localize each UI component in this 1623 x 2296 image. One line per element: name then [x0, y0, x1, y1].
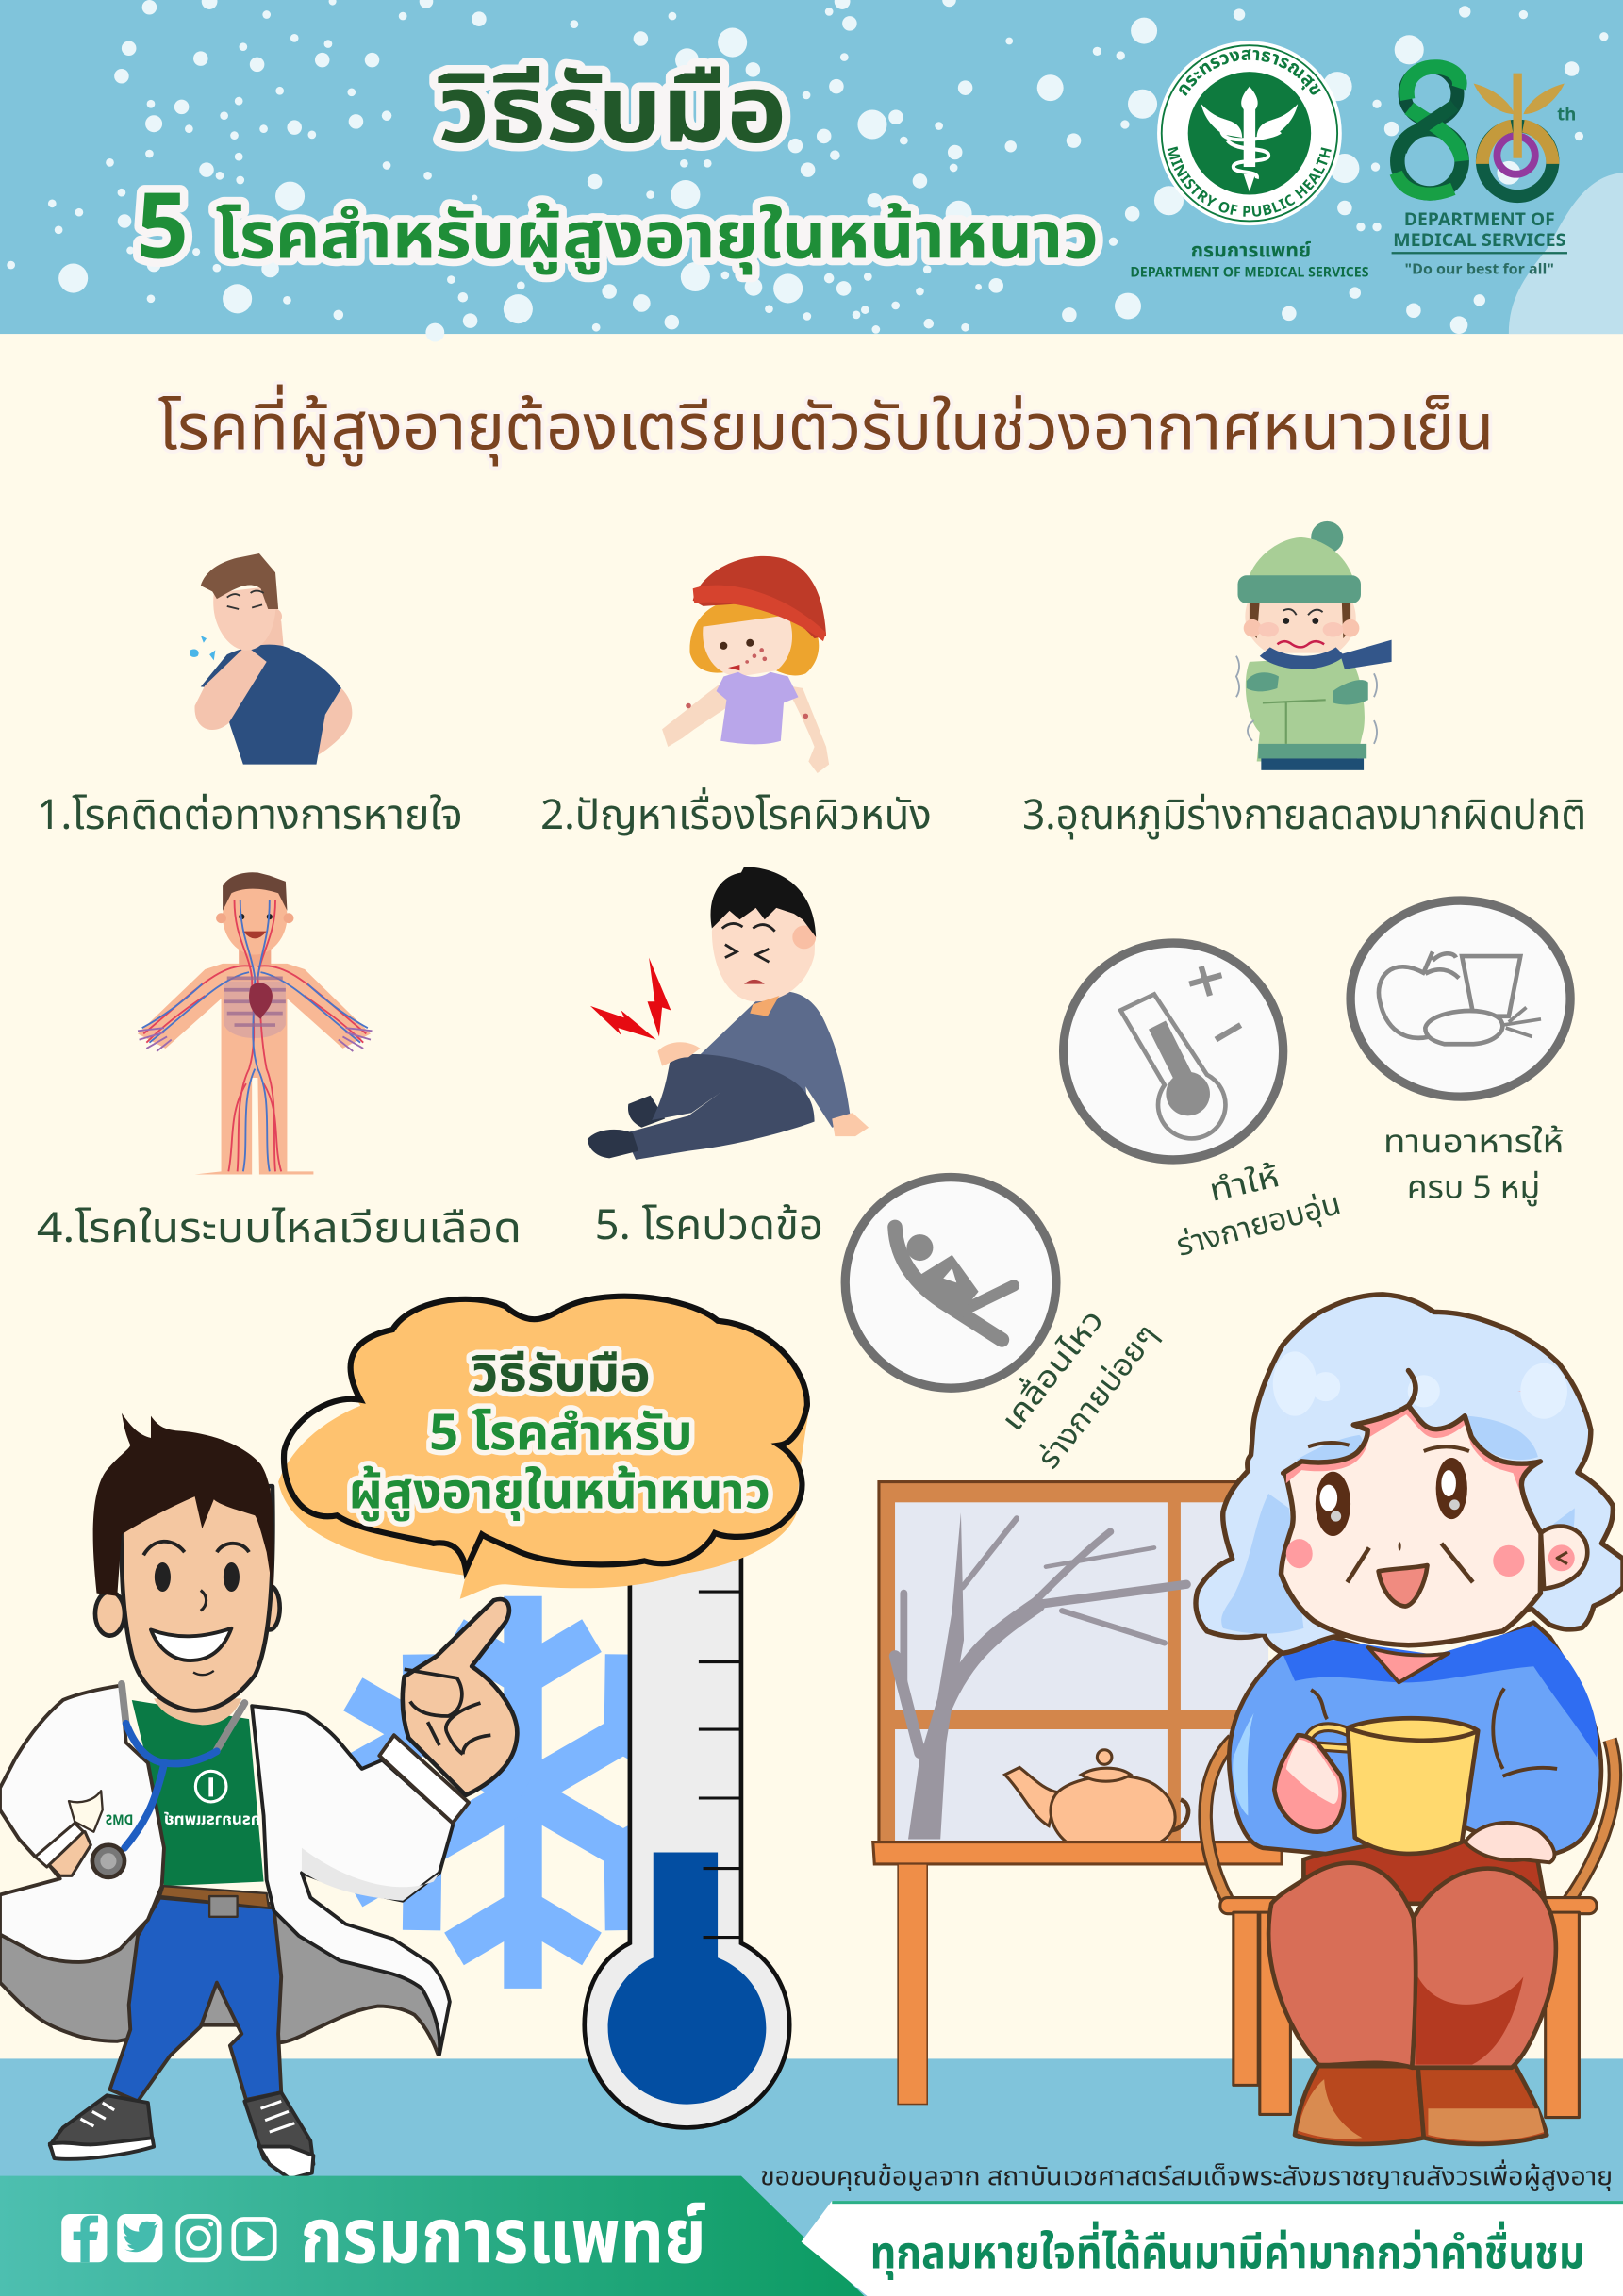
icon: balanced food — [1350, 900, 1570, 1097]
label: disease 5: 5. โรคปวดข้อ — [595, 1196, 823, 1258]
label: move the body often: เคลื่อนไหว — [990, 1299, 1116, 1442]
doctor shirt logo — [106, 1771, 260, 1832]
doctor pointing hand — [403, 1599, 517, 1795]
speech bubble — [278, 1297, 809, 1599]
logo: Ministry of Public Health: MINISTRY OF PUBLIC HEALTH — [1168, 146, 1332, 217]
shoes — [1295, 2065, 1547, 2144]
thermometer — [585, 1552, 789, 2127]
label: disease 2: 2.ปัญหาเรื่องโรคผิวหนัง — [540, 785, 932, 848]
header band with snowfall — [0, 0, 1623, 341]
doctor shoes — [50, 2092, 313, 2179]
doctor left hand — [48, 1830, 91, 1875]
doctor neck — [154, 1698, 241, 1725]
logo: Ministry of Public Health — [1130, 41, 1369, 284]
hand on knee — [1465, 1823, 1554, 1862]
doctor cape — [0, 1904, 442, 2055]
chair — [1205, 1740, 1615, 2118]
doctor coat right side and tail — [252, 1706, 453, 2055]
floor band — [0, 2058, 1623, 2296]
doctor stethoscope — [92, 1684, 244, 1877]
footer brand name: กรมการแพทย์ — [300, 2182, 706, 2296]
icon: exercise — [845, 1178, 1056, 1388]
illustration: shivering person in winter clothes — [1236, 521, 1392, 770]
title — [137, 43, 1099, 299]
social icon: facebook — [61, 2214, 107, 2262]
logo: Ministry of Public Health: กระทรวงสาธารณสุข — [1179, 49, 1321, 96]
logo: 80th anniversary — [1392, 67, 1576, 280]
illustration: boy with knee pain — [588, 867, 869, 1160]
title: โรคสำหรับผู้สูงอายุในหน้าหนาว — [215, 190, 1099, 287]
doctor shirt logo: กรมการแพทย์ — [164, 1808, 260, 1832]
eyes — [1308, 1443, 1469, 1536]
bubble text: ผู้สูงอายุในหน้าหนาว — [349, 1456, 770, 1531]
section heading: โรคที่ผู้สูงอายุต้องเตรียมตัวรับในช่วงอากาศหนาวเย็น — [158, 382, 1494, 479]
bubble text: วิธีรับมือ — [471, 1338, 651, 1413]
hair — [1196, 1295, 1623, 1653]
doctor left cuff — [35, 1823, 84, 1867]
gap between arm and coat — [69, 1791, 103, 1832]
doctor belt — [160, 1886, 269, 1908]
label: move the body often: ร่างกายบ่อยๆ — [1027, 1314, 1170, 1479]
doctor coat left side — [0, 1685, 164, 1962]
doctor cuff — [379, 1735, 469, 1823]
doctor head — [95, 1592, 124, 1636]
snowflake — [319, 1596, 727, 1989]
doctor shirt logo: DMS — [106, 1811, 133, 1831]
doctor legs — [109, 1898, 281, 2101]
bubble text — [349, 1338, 770, 1531]
label: move the body often — [990, 1299, 1170, 1479]
logo: Ministry of Public Health: DEPARTMENT OF MEDICAL SERVICES — [1130, 264, 1369, 284]
social icon: instagram — [178, 2216, 219, 2260]
doctor shirt — [132, 1700, 264, 1886]
doctor mascot — [0, 1413, 517, 2179]
footer slogan panel — [802, 2201, 1623, 2296]
fringe — [1273, 1351, 1575, 1533]
logo: Ministry of Public Health: กรมการแพทย์ — [1191, 238, 1311, 266]
title: 5 — [137, 162, 189, 299]
illustration: coughing man — [190, 553, 352, 765]
logo: 80th anniversary: th — [1557, 102, 1576, 128]
teapot — [1005, 1750, 1188, 1842]
illustration: girl with skin rash — [662, 556, 829, 773]
title: วิธีรับมือ — [438, 43, 787, 185]
icon: keep warm thermometer — [1064, 943, 1283, 1160]
label: eat from all 5 food groups — [1383, 1119, 1564, 1213]
social icon: twitter — [117, 2214, 162, 2262]
hand holding mug — [1274, 1735, 1344, 1832]
sweater — [1229, 1623, 1601, 1857]
ear — [1541, 1527, 1587, 1589]
doctor face — [143, 1542, 249, 1675]
mug — [1306, 1718, 1478, 1854]
label: disease 1: 1.โรคติดต่อทางการหายใจ — [37, 785, 463, 848]
logo: 80th anniversary: "Do our best for all" — [1405, 258, 1554, 280]
table — [873, 1842, 1282, 2105]
illustration: circulatory system body — [138, 872, 373, 1174]
label: eat from all 5 food groups: ครบ 5 หมู่ — [1407, 1165, 1540, 1213]
cheeks and mouth — [1286, 1539, 1524, 1607]
credit line: ขอขอบคุณข้อมูลจาก สถาบันเวชศาสตร์สมเด็จพระสังฆราชญาณสังวรเพื่อผู้สูงอายุ — [760, 2158, 1613, 2196]
bubble text: 5 โรคสำหรับ — [429, 1396, 693, 1472]
social icon: youtube — [234, 2219, 274, 2258]
window with winter tree — [879, 1482, 1268, 1848]
label: disease 3: 3.อุณหภูมิร่างกายลดลงมากผิดปกติ — [1022, 785, 1586, 848]
label: eat from all 5 food groups: ทานอาหารให้ — [1383, 1119, 1564, 1167]
footer bar — [0, 2176, 1623, 2296]
label: disease 4: 4.โรคในระบบไหลเวียนเลือด — [37, 1198, 522, 1261]
logo: 80th anniversary: DEPARTMENT OF — [1404, 207, 1555, 234]
logo: 80th anniversary: MEDICAL SERVICES — [1393, 228, 1565, 255]
face — [1281, 1391, 1552, 1645]
label: keep the body warm: ทำให้ — [1205, 1153, 1284, 1215]
trousers — [1268, 1841, 1556, 2068]
grandmother — [1196, 1295, 1623, 2144]
label: keep the body warm: ร่างกายอบอุ่น — [1171, 1181, 1346, 1270]
